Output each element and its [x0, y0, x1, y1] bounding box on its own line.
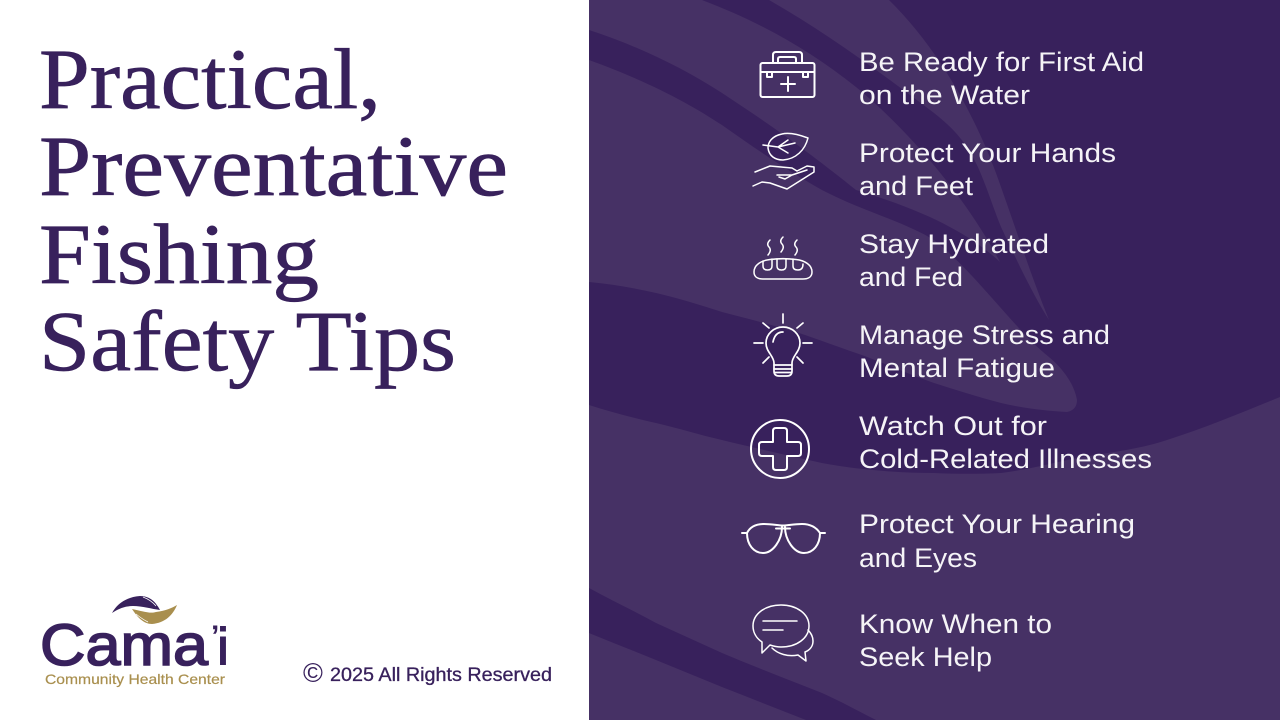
icon: speech bubbles	[753, 605, 813, 661]
title: Preventative	[39, 118, 508, 214]
tip 6 text: Protect Your Hearing	[859, 509, 1135, 539]
tip 2: hands and feet	[753, 133, 1116, 201]
title: Practical,	[39, 31, 381, 127]
tip 5 text: Cold-Related Illnesses	[859, 444, 1152, 474]
logo: Cama'i Community Health Center	[40, 596, 229, 687]
icon: medical cross in circle	[751, 420, 809, 478]
left white panel	[0, 0, 589, 720]
icon: first aid kit	[760, 52, 814, 97]
tip 5 text: Watch Out for	[859, 411, 1047, 441]
tip 6 text	[859, 509, 1135, 573]
icon: steaming bread	[754, 237, 812, 279]
copyright	[303, 658, 552, 688]
tip 2 text: and Feet	[859, 171, 974, 201]
tip 2 text	[859, 138, 1116, 201]
icon: light bulb	[754, 314, 812, 376]
tip 4 text: Mental Fatigue	[859, 353, 1055, 383]
title: Fishing	[39, 206, 319, 302]
tip list	[742, 47, 1152, 672]
tip 4 text: Manage Stress and	[859, 320, 1110, 350]
tip 4: stress and fatigue	[754, 314, 1110, 383]
tip 7 text: Know When to	[859, 609, 1052, 639]
icon: glasses	[742, 524, 825, 553]
copyright: 2025 All Rights Reserved	[330, 664, 552, 686]
tip 3 text: and Fed	[859, 262, 963, 292]
tip 7 text: Seek Help	[859, 642, 992, 672]
tip 4 text	[859, 320, 1110, 383]
tip 7: seek help	[753, 605, 1052, 672]
tip 1 text	[859, 47, 1144, 110]
tip 5 text	[859, 411, 1152, 474]
tip 5: cold-related illnesses	[751, 411, 1152, 478]
logo emblem swoosh	[112, 596, 177, 624]
tip 7 text	[859, 609, 1052, 672]
tip 3 text	[859, 229, 1049, 292]
logo tagline: Community Health Center	[45, 671, 225, 687]
icon: hand holding leaf	[753, 133, 814, 189]
tip 3 text: Stay Hydrated	[859, 229, 1049, 259]
logo: Cama'i Community Health Center: ’	[211, 620, 219, 653]
tip 1: first aid	[760, 47, 1144, 110]
right purple panel with swoosh background	[589, 0, 1280, 720]
tip 6: hearing and eyes	[742, 509, 1135, 573]
logo: Cama'i Community Health Center: i	[217, 617, 229, 677]
title: Safety Tips	[39, 293, 456, 389]
tip 2 text: Protect Your Hands	[859, 138, 1116, 168]
logo wordmark: Cama	[40, 613, 209, 678]
tip 1 text: on the Water	[859, 80, 1030, 110]
title	[39, 31, 508, 389]
tip 3: hydrated and fed	[754, 229, 1049, 292]
tip 1 text: Be Ready for First Aid	[859, 47, 1144, 77]
copyright: ©	[303, 658, 323, 688]
tip 6 text: and Eyes	[859, 543, 977, 573]
